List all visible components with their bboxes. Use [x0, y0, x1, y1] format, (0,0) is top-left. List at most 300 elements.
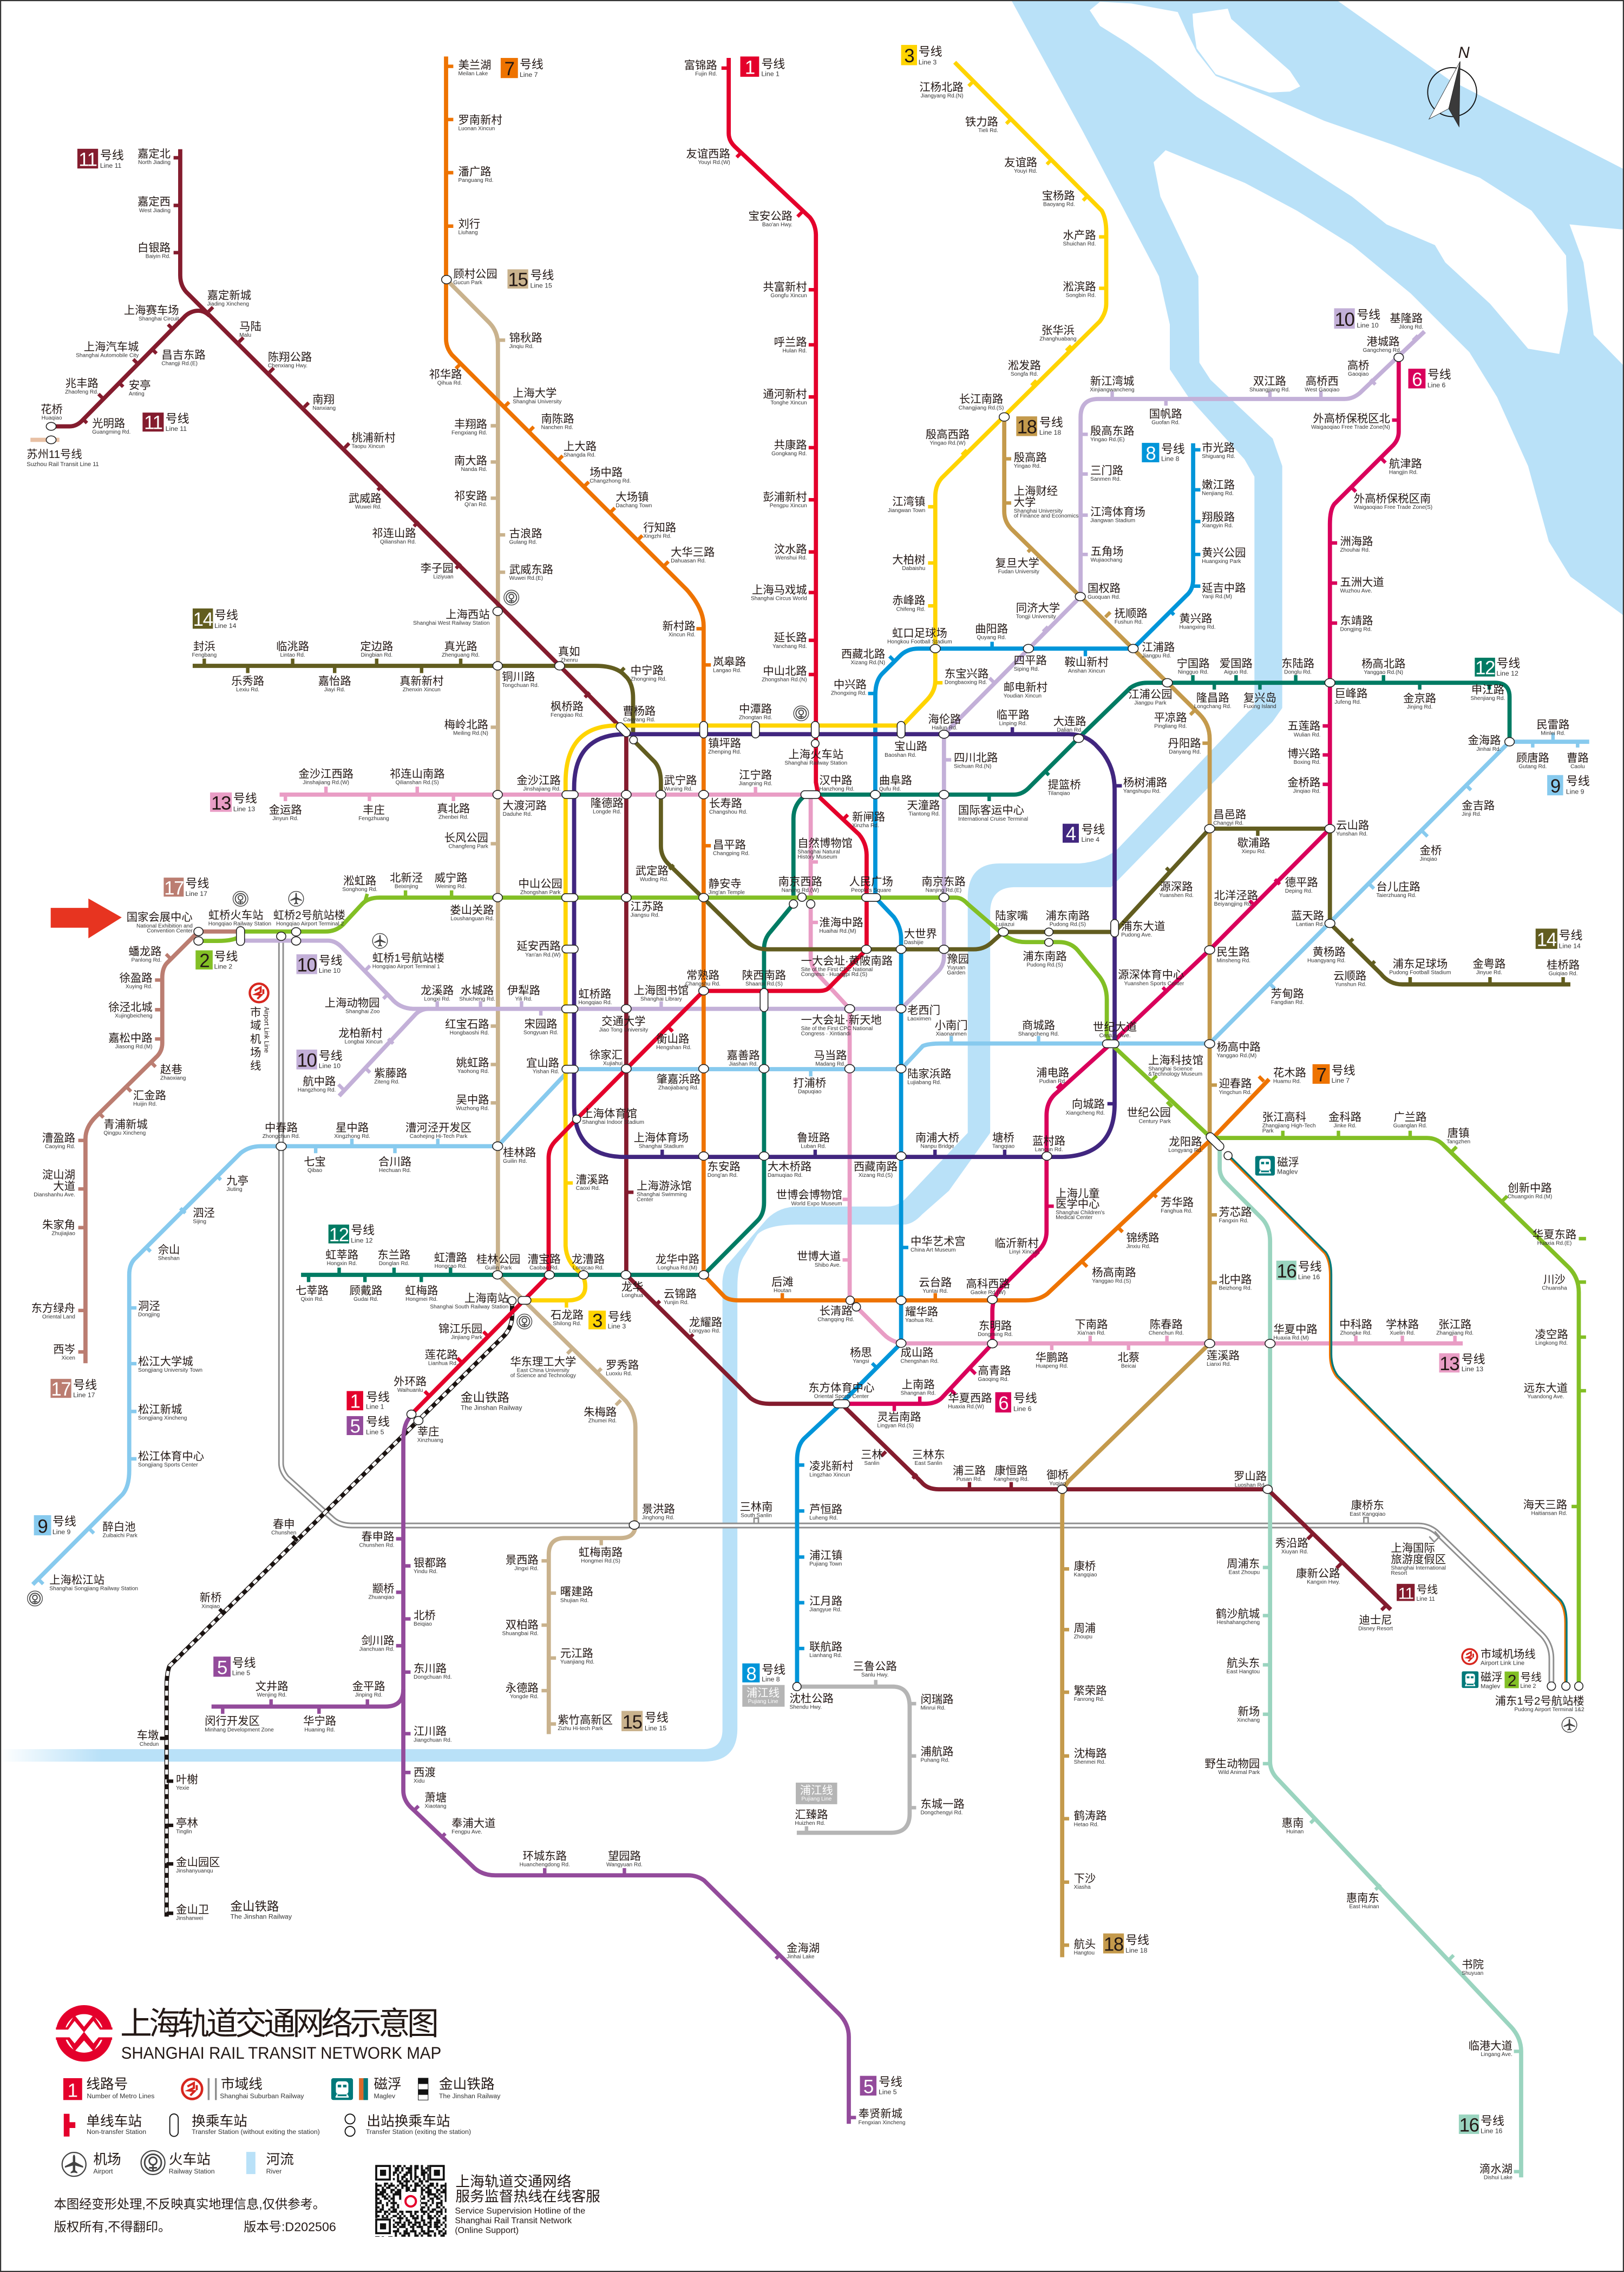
badge: line 15 top: 15	[508, 270, 527, 291]
line 8 station labels: Shendu Hwy.	[790, 1705, 822, 1711]
service hotline text	[455, 2173, 600, 2235]
line 8 station labels: Anshan Xincun	[1068, 668, 1105, 674]
line 6 station labels: Jinqiao Rd.	[1293, 788, 1320, 794]
line 17 station labels: Qingpu Xincheng	[103, 1130, 146, 1136]
badge: line 2 east: 2	[1508, 1672, 1516, 1690]
line 15 station labels: 南大路	[454, 455, 487, 467]
line 17 station labels	[31, 945, 186, 1361]
line 11 station labels: 秀沿路	[1275, 1537, 1308, 1549]
line 3 station labels: 东宝兴路	[945, 668, 988, 680]
line 2 station labels: 世纪公园	[1127, 1107, 1171, 1119]
badge: line 13 east	[1439, 1353, 1485, 1374]
badge: line 5 south	[860, 2075, 902, 2097]
badge: line 5 west: 号线	[232, 1656, 256, 1670]
line 18 station labels: Fanrong Rd.	[1074, 1697, 1104, 1703]
line 2 station labels: Jinke Rd.	[1333, 1123, 1357, 1129]
line 10 station labels: 虹桥1号航站楼	[372, 953, 444, 965]
pujiang line station labels and tags	[742, 1660, 965, 1826]
line 2 station labels: 南京西路	[778, 876, 822, 888]
badge: line 17 top: 号线	[186, 877, 209, 891]
line 14 station labels: 桂桥路	[1547, 960, 1580, 972]
line 5 station labels: Wenjing Rd.	[257, 1692, 287, 1698]
line 3 station labels: 虹口足球场	[892, 628, 947, 640]
line 12 station labels: 宁国路	[1177, 658, 1210, 670]
line 10 station labels: Siping Rd.	[1014, 666, 1039, 672]
legend: jinshan railway: The Jinshan Railway	[439, 2092, 501, 2100]
jinshan railway and link line labels: 旅游度假区	[1391, 1553, 1446, 1566]
line 11 station labels: 上海赛车场	[124, 305, 179, 317]
line 1 station labels: 汉中路	[819, 775, 852, 787]
line 11 station labels: Sanlin	[864, 1461, 880, 1466]
jinshan railway and link line labels: The Jinshan Railway	[231, 1913, 292, 1921]
badge: line 17 lower: 17	[51, 1379, 70, 1400]
badge: line 16 lower: 号线	[1481, 2114, 1504, 2127]
line 10 station labels: 天潼路	[907, 800, 940, 811]
map icons: airports and railway stations	[28, 590, 1577, 1732]
badge: lines 1 and 5: 号线	[366, 1415, 390, 1429]
line 3 station labels: Jiangwan Town	[888, 508, 925, 514]
line 11 station labels: Nanxiang	[312, 405, 336, 411]
line 6 station labels: 高青路	[978, 1365, 1011, 1377]
jinshan railway and link line labels	[137, 1006, 1536, 1922]
line 9 station labels: Jinji Rd.	[1462, 811, 1481, 817]
badge: line 12 east: 号线	[1496, 657, 1520, 670]
line 1 station labels: 常熟路	[686, 970, 719, 982]
badge: line 11 east: 号线	[1416, 1584, 1438, 1596]
line 8 station labels: 鞍山新村	[1064, 657, 1109, 669]
line 11 station labels: Zhenru	[560, 657, 578, 663]
line 1 station labels: Zhongshan Rd.(N)	[762, 677, 807, 683]
line 5 station labels: 北桥	[414, 1610, 436, 1622]
line 8 station labels: 黄兴公园	[1202, 547, 1246, 559]
badge: line 15 lower: 号线	[645, 1711, 669, 1725]
badge: line 7 lower	[1313, 1064, 1355, 1085]
line 1 station labels: 漕宝路	[528, 1254, 561, 1266]
line 13 station labels: Daduhe Rd.	[503, 811, 532, 817]
line 15 station labels: 祁安路	[454, 490, 487, 502]
line 6 station labels: Medical Center	[1056, 1215, 1093, 1221]
line 2 station labels: Nanjing Rd.(E)	[926, 888, 961, 894]
line 6 station labels: 浦电路	[1036, 1068, 1069, 1079]
line 10 station labels: Longxi Rd.	[424, 996, 450, 1002]
line 9 station labels: Hechuan Rd.	[379, 1168, 411, 1174]
line 8 station labels: Shiguang Rd.	[1202, 454, 1235, 460]
line 7 station labels: Gaoke Rd.(W)	[971, 1289, 1006, 1295]
line 16 station labels: Shuyuan	[1462, 1970, 1483, 1976]
line 18 station labels: 莲溪路	[1207, 1350, 1240, 1362]
line 7 station labels: Houtan	[774, 1288, 791, 1294]
line 8 station labels: 沈杜公路	[790, 1693, 834, 1705]
line 6 station labels: Gaoqing Rd.	[978, 1377, 1009, 1383]
line 5 station labels: Xidu	[414, 1778, 424, 1784]
line 11 station labels: 康新公路	[1296, 1568, 1340, 1580]
line 11 station labels: 云锦路	[664, 1288, 697, 1300]
line 3 station labels: Jinshajiang Rd.	[523, 786, 561, 792]
line 3 station labels: 龙漕路	[572, 1254, 605, 1266]
line 17 station labels: 嘉松中路	[108, 1032, 153, 1044]
line 11 station labels: Pusan Rd.	[957, 1477, 982, 1483]
line 6 station labels: 外高桥保税区北	[1313, 413, 1390, 425]
badge: lines 1 and 5: 1	[350, 1392, 360, 1412]
badge: line 18 top: 号线	[1039, 416, 1063, 429]
line 1 station labels: 外环路	[394, 1376, 427, 1388]
line 10 station labels: 豫园	[947, 954, 969, 966]
badge: line 17 lower: Line 17	[73, 1391, 95, 1399]
line 15 station labels: 锦秋路	[509, 332, 542, 344]
line 13 station labels: 陈春路	[1150, 1319, 1183, 1331]
line 9 station labels: 泗泾	[193, 1208, 215, 1220]
line 10 station labels: 双江路	[1253, 376, 1286, 388]
line 5 station labels: 银都路	[414, 1557, 447, 1569]
line 15 station labels: 古浪路	[509, 528, 542, 540]
line 6 station labels: 上南路	[902, 1379, 935, 1391]
line 16 station labels: 新场	[1238, 1706, 1260, 1718]
compass: N	[1458, 44, 1470, 62]
line 11 station labels: 祁连山路	[372, 528, 416, 540]
line 2 route	[199, 891, 1586, 1686]
line 10 station labels: Shuangjiang Rd.	[1249, 387, 1290, 393]
line 16 station labels: East Zhoupu	[1229, 1570, 1260, 1576]
line 2 station labels: 金科路	[1328, 1112, 1361, 1124]
line 8 station labels: 曲阳路	[975, 623, 1008, 635]
legend: transfer station exiting: Transfer Station (exiting the station)	[366, 2128, 471, 2136]
line 11 station labels: Qilianshan Rd.	[380, 539, 416, 545]
line 5 station labels: Yindu Rd.	[414, 1569, 437, 1575]
line 10 station labels: 上海动物园	[325, 997, 379, 1009]
line 15 station labels	[413, 332, 675, 1732]
line 13 station labels: 江宁路	[739, 770, 772, 782]
line 9 station labels: Xiaonanmen	[936, 1031, 967, 1037]
line 15 station labels: Jingxi Rd.	[514, 1566, 539, 1572]
line 14 station labels: Yunshun Rd.	[1335, 982, 1366, 988]
line 2 station labels: 国家会展中心	[127, 912, 193, 924]
line 6 station labels: Dongjing Rd.	[1340, 627, 1372, 633]
line 15 station labels: 姚虹路	[456, 1057, 489, 1069]
line 8 station labels: 联航路	[809, 1641, 842, 1653]
line 2 station labels: Haitiansan Rd.	[1531, 1511, 1567, 1517]
badge: line 6 top: 号线	[1427, 368, 1451, 382]
badge: line 11 top: 号线	[100, 148, 124, 162]
badge: line 14 west	[193, 608, 238, 630]
line 8 station labels: Nenjiang Rd.	[1202, 490, 1234, 496]
line 8 station labels: Zhongxing Rd.	[831, 691, 867, 697]
line 6 station labels: 东明路	[979, 1320, 1012, 1332]
line 4 station labels: Luban Rd.	[801, 1144, 826, 1150]
line 3 station labels: Shuichan Rd.	[1063, 241, 1096, 247]
badge: line 8 lower: 8	[746, 1664, 756, 1685]
line 5 station labels: 金平路	[352, 1681, 385, 1693]
line 2 station labels: Loushanguan Rd.	[450, 916, 494, 922]
line 6 station labels: Oriental Sports Center	[814, 1394, 869, 1400]
pujiang line station labels and tags: 浦航路	[920, 1746, 953, 1758]
line 1 route	[411, 58, 867, 1414]
line 10 station labels: Laoximen	[907, 1016, 931, 1022]
line 10 station labels: Shanghai Zoo	[345, 1009, 380, 1014]
line 13 station labels: Wuning Rd.	[664, 786, 692, 792]
disclaimer text	[54, 2197, 336, 2234]
line 3 station labels: Hongkou Football Stadium	[887, 639, 952, 645]
badge: line 12 east: 12	[1475, 658, 1495, 678]
line 10 station labels: 龙柏新村	[338, 1027, 383, 1039]
line 7 station labels: Shangda Rd.	[564, 453, 595, 459]
disclaimer text: 本图经变形处理,不反映真实地理信息,仅供参考。	[54, 2197, 325, 2211]
badge: line 11 top: 11	[78, 149, 97, 170]
line 2 station labels: 南京东路	[921, 876, 966, 888]
line 9 station labels: Dapuqiao	[798, 1089, 822, 1095]
line 12 station labels: Guilin Park	[485, 1265, 512, 1271]
line 12 station labels: 桂林公园	[476, 1254, 520, 1266]
line 8 station labels: 大世界	[904, 928, 937, 940]
line 8 station labels: Luheng Rd.	[809, 1515, 838, 1521]
line 2 station labels: &Technology Museum	[1148, 1071, 1202, 1077]
line 14 station labels: 临洮路	[276, 641, 309, 653]
line 17 station labels: 赵巷	[160, 1064, 182, 1076]
line 3 station labels: 宜山路	[526, 1057, 559, 1069]
line 4 station labels: Damuqiao Rd.	[768, 1173, 803, 1178]
line 9 station labels: 合川路	[378, 1156, 411, 1168]
line 4 station labels: 向城路	[1072, 1099, 1105, 1111]
line 15 station labels: Jinqiu Rd.	[509, 344, 534, 350]
line 11 station labels: 龙华	[621, 1281, 643, 1293]
badge: line 13 west: 号线	[233, 792, 257, 806]
line 10 station labels: Guofan Rd.	[1151, 420, 1180, 425]
line 13 station labels: Madang Rd.	[815, 1062, 846, 1068]
line 10 station labels: Yingao Rd.(E)	[1090, 437, 1125, 443]
line 7 station labels: 岚皋路	[713, 656, 746, 668]
line 7 station labels: Langao Rd.	[713, 667, 741, 673]
line 3 station labels: Baoshan Rd.	[885, 752, 916, 758]
line 6 station labels: 金桥路	[1287, 777, 1320, 789]
line 3 station labels: 金沙江路	[516, 775, 561, 787]
line 14 station labels: Guiqiao Rd.	[1549, 971, 1577, 977]
badge: line 16 mid: 16	[1276, 1261, 1296, 1282]
badge: lines 1 and 5: Line 5	[366, 1428, 384, 1436]
line 1 station labels: Wenshui Rd.	[776, 555, 807, 561]
line 12 station labels: Jiangpu Park	[1134, 700, 1167, 706]
line 3 station labels: 长江南路	[959, 394, 1003, 405]
line 7 station labels: Yanggao Rd.(S)	[1092, 1279, 1131, 1285]
line 7 station labels: Luonan Xincun	[458, 126, 495, 132]
line 18 station labels: Yingchun Rd.	[1219, 1090, 1252, 1096]
service hotline text: Service Supervision Hotline of the	[455, 2206, 585, 2216]
jinshan railway and link line labels: Airport Link Line	[263, 1007, 270, 1053]
line 7 station labels: 南陈路	[541, 414, 574, 425]
line 7 station labels: Xingzhi Rd.	[643, 533, 671, 539]
jinshan railway and link line labels: 康桥东	[1351, 1500, 1384, 1512]
line 6 station labels: 华夏西路	[948, 1393, 992, 1405]
pujiang line station labels and tags: 东城一路	[920, 1799, 965, 1811]
line 7 station labels: 潘广路	[458, 166, 491, 178]
line 18 station labels: Hetao Rd.	[1074, 1822, 1098, 1828]
jinshan railway and link line labels: Chedun	[140, 1741, 159, 1747]
line 10 station labels: Songyuan Rd.	[523, 1030, 558, 1036]
line 18 station labels: 迎春路	[1219, 1078, 1252, 1090]
line 1 station labels: 上海火车站	[788, 749, 843, 761]
line 17 station labels: Panlong Rd.	[132, 957, 161, 963]
legend: metro line number	[63, 2077, 154, 2101]
line 6 station labels: 医学中心	[1056, 1198, 1099, 1210]
line 2 station labels	[127, 872, 1584, 1713]
badge: line 1: Line 1	[761, 70, 780, 77]
line 9 station labels: Shanghai Songjiang Railway Station	[49, 1586, 138, 1592]
line 4 station labels: Tangqiao	[992, 1144, 1014, 1150]
line 6 station labels: 北洋泾路	[1214, 890, 1258, 902]
badge: line 5 west: Line 5	[232, 1669, 250, 1677]
line 3 station labels: 曹杨路	[623, 706, 656, 718]
line 15 station labels: Hongbaoshi Rd.	[450, 1030, 489, 1036]
service hotline text: 上海轨道交通网络	[455, 2173, 571, 2190]
line 1 station labels: Shanghai Indoor Stadium	[582, 1119, 644, 1125]
badge: line 15 lower: Line 15	[645, 1725, 666, 1732]
jinshan railway and link line labels: Resort	[1391, 1570, 1407, 1576]
line 12 station labels: 隆昌路	[1196, 692, 1229, 704]
line 7 station labels: 场中路	[590, 467, 623, 479]
line 6 station labels: Wuzhou Ave.	[1340, 588, 1372, 594]
jinshan railway and link line labels: 域	[250, 1019, 261, 1032]
line 3 station labels: Youyi Rd.	[1014, 168, 1037, 174]
title: 上海轨道交通网络示意图	[120, 2006, 439, 2041]
line 16 station labels: 野生动物园	[1205, 1758, 1260, 1770]
badge: line 11 top	[77, 148, 124, 170]
line 11 station labels: 安亭	[129, 379, 151, 391]
line 10 station labels: 航中路	[303, 1076, 336, 1088]
line 14 station labels: Lintao Rd.	[280, 652, 305, 658]
line 12 station labels: 东兰路	[377, 1249, 410, 1261]
line 10 station labels: Guoquan Rd.	[1088, 594, 1120, 600]
line 16 station labels: 惠南	[1282, 1818, 1304, 1830]
line 15 station labels: 丰翔路	[454, 419, 487, 431]
badge: line 11 east: 11	[1398, 1584, 1413, 1602]
line 5 station labels: Minhang Development Zone	[205, 1727, 274, 1733]
line 3 station labels: Zhongtan Rd.	[739, 715, 772, 721]
line 2 station labels: Hongqiao Railway Station	[208, 921, 271, 927]
line 9 station labels: Sijing	[193, 1219, 206, 1225]
jinshan railway and link line labels: The Jinshan Railway	[461, 1404, 522, 1412]
line 1 station labels: Lianhua Rd.	[428, 1360, 458, 1366]
line 17 station labels: Xicen	[62, 1356, 75, 1361]
line 13 station labels: 长清路	[820, 1305, 853, 1317]
line 13 station labels: 世博大道	[797, 1251, 841, 1263]
badge: line 9 east: 9	[1550, 776, 1560, 797]
line 11 station labels: Anting	[129, 391, 145, 397]
line 1 station labels: 上海体育馆	[582, 1108, 637, 1120]
line 3 station labels: 中潭路	[739, 703, 772, 715]
line 6 station labels: Hangjin Rd.	[1389, 470, 1418, 476]
line 15 station labels: Nanda Rd.	[461, 467, 487, 473]
line 18 route	[1004, 417, 1217, 1957]
jinshan railway route	[160, 1301, 512, 1917]
line 6 station labels: Pudian Rd.	[1039, 1079, 1066, 1085]
line 5 station labels: 金海湖	[787, 1942, 820, 1954]
line 18 station labels: Hangtou	[1074, 1950, 1095, 1956]
line 10 station labels: Tiantong Rd.	[909, 811, 940, 817]
line 1 station labels: 中山北路	[763, 666, 807, 678]
badge: line 14 west: Line 14	[214, 622, 237, 630]
badge: line 10 top: 号线	[1357, 308, 1380, 322]
line 9 station labels: 金吉路	[1462, 800, 1495, 812]
line 10 station labels: 四平路	[1014, 655, 1047, 667]
line 18 station labels: 繁荣路	[1074, 1685, 1107, 1697]
line 8 station labels: 陆家浜路	[907, 1069, 951, 1081]
badge: line 13 east: 13	[1439, 1354, 1459, 1374]
line 8 station labels: Pujiang Town	[809, 1561, 842, 1567]
line 7 station labels: 花木路	[1273, 1068, 1306, 1079]
line 3 station labels: Songbin Rd.	[1066, 293, 1096, 299]
line 13 station labels: Jiangning Rd.	[739, 781, 772, 787]
line 5 station labels: 文井路	[256, 1681, 289, 1693]
line 14 station labels: 云顺路	[1333, 971, 1366, 983]
line 15 station labels: 罗秀路	[606, 1360, 639, 1372]
line 7 station labels: 昌平路	[713, 839, 746, 851]
line 11 station labels: Baiyin Rd.	[146, 254, 171, 260]
badge: line 4: 号线	[1081, 823, 1105, 836]
line 5 station labels: 剑川路	[361, 1635, 394, 1647]
line 7 station labels: Longhua Rd.(M)	[658, 1265, 697, 1271]
badge: line 13 east: 号线	[1462, 1353, 1485, 1366]
legend: maglev: Maglev	[374, 2092, 396, 2100]
line 8 station labels: 中兴路	[834, 679, 867, 691]
line 15 station labels: 华东理工大学	[510, 1357, 576, 1369]
badge: line 17 top: Line 17	[186, 890, 207, 898]
line 18 station labels: 芳芯路	[1219, 1207, 1252, 1219]
line 6 station labels: 临沂新村	[995, 1238, 1039, 1249]
line 15 station labels: East China University	[517, 1368, 570, 1374]
line 8 station labels: Xiangyin Rd.	[1202, 523, 1233, 529]
line 13 station labels: Jinshajiang Rd.(W)	[303, 780, 349, 785]
badge: line 10 mid	[297, 954, 343, 976]
line 3 station labels: Chifeng Rd.	[896, 606, 925, 612]
line 11 station labels: Taopu Xincun	[351, 443, 385, 449]
jinshan railway and link line labels: Maglev	[1277, 1169, 1298, 1176]
badge: line 7 lower: 7	[1317, 1065, 1326, 1085]
badge: line 7 top: 7	[505, 59, 514, 80]
badge: line 6 lower: 6	[998, 1393, 1008, 1414]
line 3 station labels: 镇坪路	[708, 738, 741, 750]
badge: line 16 mid	[1276, 1260, 1322, 1282]
line 13 station labels: Changqing Rd.	[817, 1317, 854, 1322]
line 5 station labels: Wangyuan Rd.	[606, 1862, 643, 1868]
line 12 station labels: 复兴岛	[1243, 692, 1276, 704]
maglev route	[1227, 1155, 1567, 1687]
line 8 station labels: 市光路	[1202, 442, 1235, 454]
line 14 station labels: Xiepu Rd.	[1242, 849, 1266, 855]
line 14 route	[193, 659, 1570, 984]
line 17 station labels: Zhujiajiao	[51, 1230, 75, 1236]
line 7 station labels: 肇嘉浜路	[657, 1074, 700, 1086]
legend: transfer station exiting: 出站换乘车站	[366, 2113, 450, 2129]
service hotline text: Shanghai Rail Transit Network	[455, 2216, 572, 2225]
line 11 station labels: Shanghai Swimming	[637, 1192, 687, 1198]
line 6 station labels: Shangnan Rd.	[901, 1390, 936, 1396]
line 6 station labels: 航津路	[1389, 459, 1422, 470]
jinshan railway and link line labels: 磁浮	[1481, 1672, 1503, 1684]
legend: transfer station: 换乘车站	[192, 2113, 247, 2129]
line 6 station labels	[808, 413, 1432, 1429]
line 8 station labels: 芦恒路	[809, 1504, 842, 1516]
jinshan railway and link line labels: 磁浮	[1277, 1157, 1299, 1169]
line 5 station labels: 闵行开发区	[205, 1716, 260, 1727]
line 2 station labels: Jiangsu Rd.	[631, 913, 659, 919]
line 3 station labels: 淞发路	[1008, 360, 1041, 372]
line 13 station labels: 北蔡	[1117, 1352, 1140, 1364]
line 5 station labels: Dongchuan Rd.	[414, 1674, 452, 1680]
line 12 station labels: Fuxing Island	[1243, 704, 1276, 710]
line 9 station labels	[49, 718, 1589, 1592]
line 10 station labels: Garden	[947, 970, 965, 976]
line 2 station labels: 远东大道	[1524, 1383, 1568, 1394]
line 18 station labels: 民生路	[1216, 946, 1249, 958]
line 11 station labels: 马陆	[239, 321, 261, 333]
